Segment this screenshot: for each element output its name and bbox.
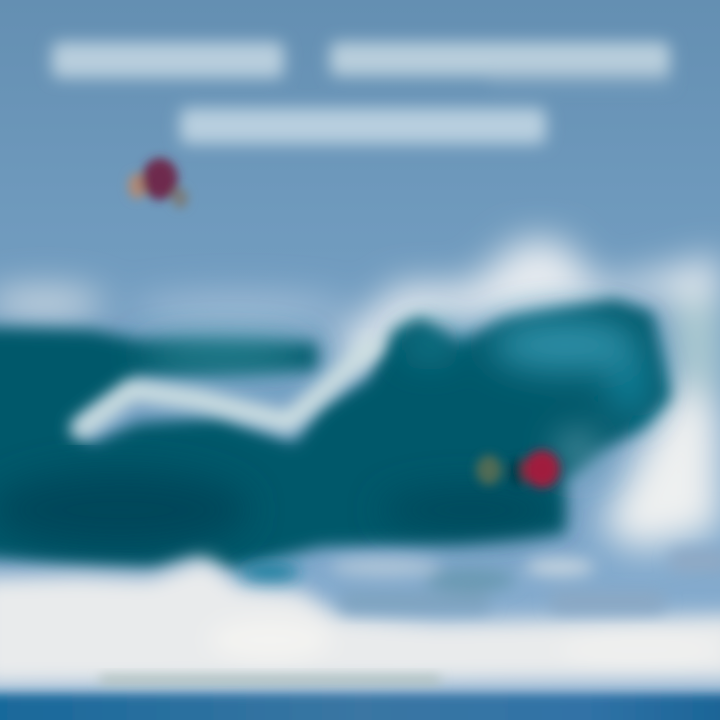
surfer: red figure on the wave: [476, 450, 560, 488]
wave: dark teal body: [0, 300, 670, 570]
spray: white clouds above the wave: [0, 240, 720, 550]
icon: kite in the sky: [128, 158, 188, 208]
streak: white foam across the wave: [82, 345, 372, 428]
water: deep blue strip at the bottom: [0, 676, 720, 720]
wave: lighter teal highlights: [0, 319, 650, 550]
title: blurred headline bars: [52, 42, 670, 144]
foam: white breaking band: [0, 558, 720, 685]
water: blue-grey shadow patches behind foam: [240, 550, 720, 612]
